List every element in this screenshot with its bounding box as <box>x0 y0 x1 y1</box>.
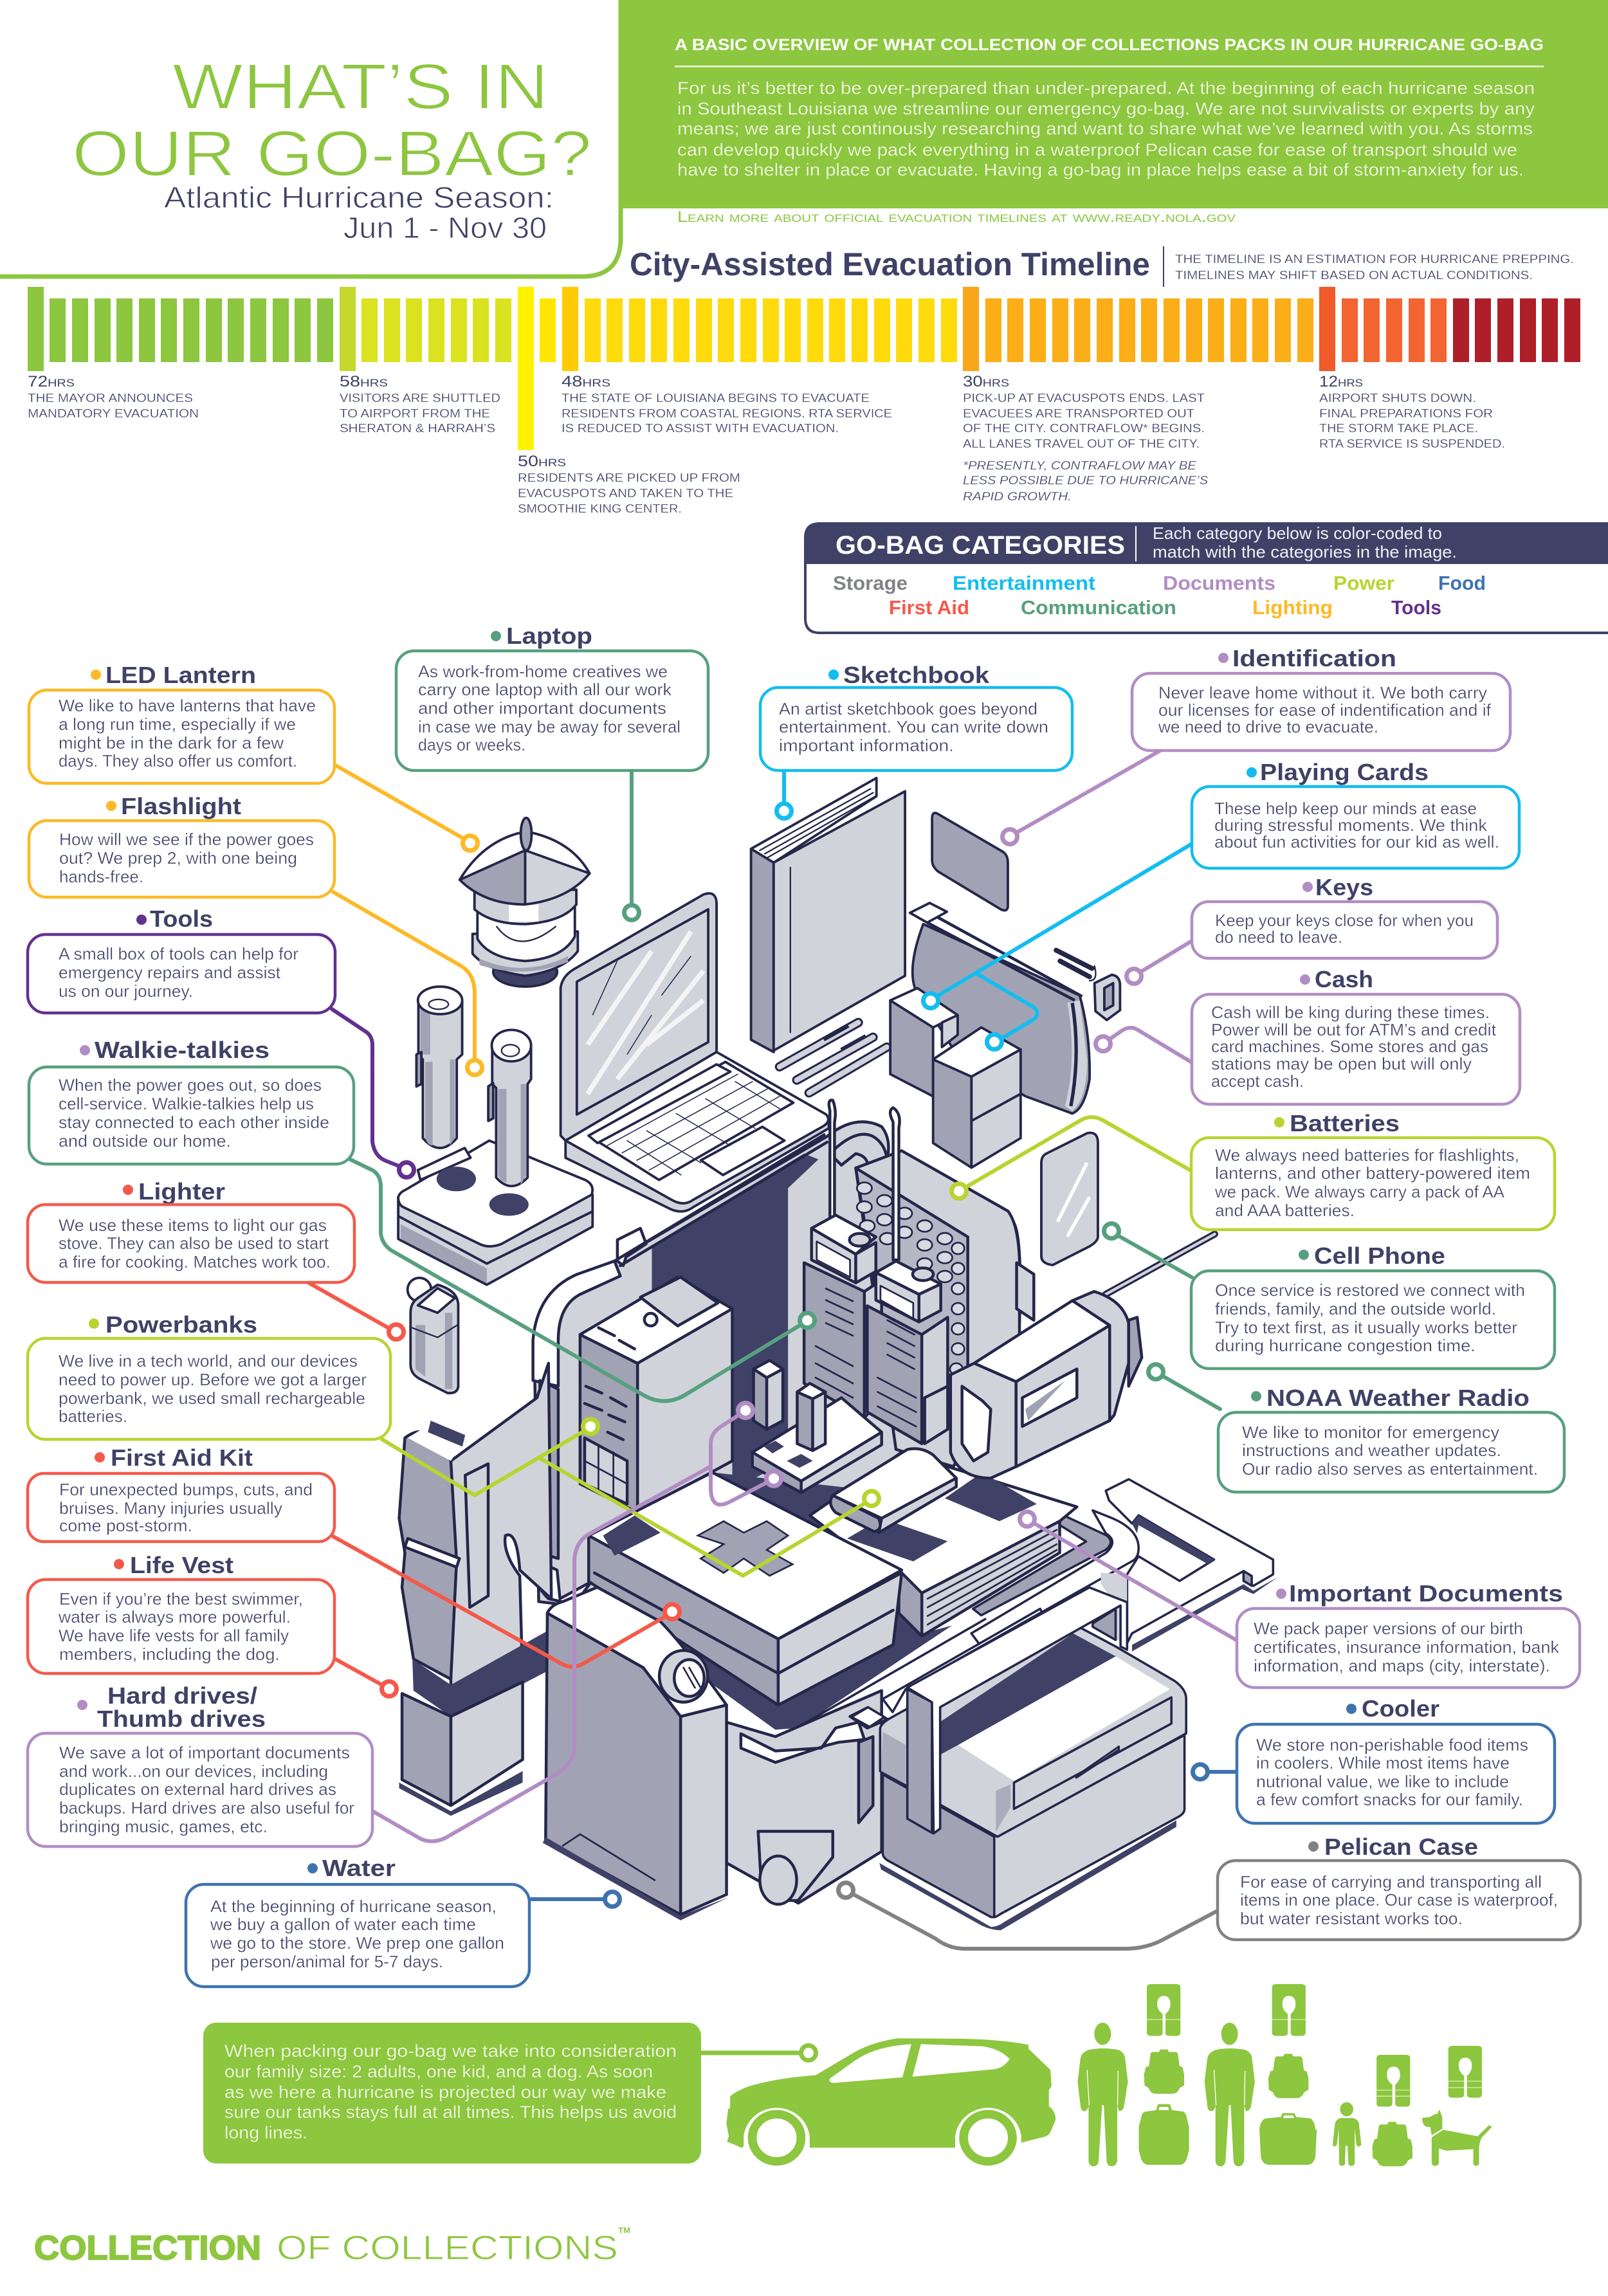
arrow: Cooler <box>1192 1765 1237 1779</box>
callout: Life Vest: members, including the dog. <box>59 1645 280 1664</box>
callout: Life Vest: Even if you’re the best swimmer, <box>59 1589 303 1608</box>
callout: Batteries: lanterns, and other battery-powered item <box>1215 1163 1530 1183</box>
callout: First Aid Kit: For unexpected bumps, cuts, and <box>59 1480 313 1499</box>
timeline label: 58 hours: SHERATON & HARRAH’S <box>340 422 495 435</box>
callout: Walkie-talkies: Walkie-talkies <box>95 1037 270 1063</box>
callout: Keys: do need to leave. <box>1215 927 1342 947</box>
callout: Important Documents <box>1237 1580 1580 1688</box>
icon: portable battery tower <box>580 1277 732 1513</box>
callout: Life Vest: Life Vest <box>130 1552 233 1578</box>
panel: go-bag categories: Food <box>1438 572 1486 594</box>
header panel: green overview background <box>619 0 1608 208</box>
timeline label: 72 hours: MANDATORY EVACUATION <box>28 407 199 420</box>
arrow: Flashlight <box>333 892 482 1075</box>
callout: Powerbanks: Powerbanks <box>105 1311 257 1338</box>
callout: LED Lantern: LED Lantern <box>105 662 256 688</box>
panel: go-bag categories: Tools <box>1391 596 1441 619</box>
arrow: Walkie-talkies <box>351 1160 814 1401</box>
callout: Keys: Keep your keys close for when you <box>1215 911 1474 930</box>
callout: Playing Cards: about fun activities for our kid as well. <box>1214 832 1499 852</box>
callout: NOAA Weather Radio: NOAA Weather Radio <box>1266 1385 1530 1411</box>
timeline label: 12 hours: AIRPORT SHUTS DOWN. <box>1319 392 1476 405</box>
callout: Laptop: and other important documents <box>418 698 666 718</box>
timeline label: 50 hours: RESIDENTS ARE PICKED UP FROM <box>518 471 740 484</box>
callout: Important Documents: Important Documents <box>1289 1580 1563 1607</box>
callout: Cell Phone: Once service is restored we connect with <box>1215 1280 1525 1300</box>
evacuation link: Learn more about official evacuation timelines at www.ready.nola.gov <box>677 208 1236 226</box>
panel: go-bag categories: Each category below is color-coded to <box>1153 524 1442 543</box>
icon: lighter <box>408 1278 458 1393</box>
callout: First Aid Kit: First Aid Kit <box>111 1444 253 1471</box>
callout: Cash: Cash will be king during these times. <box>1211 1003 1490 1022</box>
panel: go-bag categories: Lighting <box>1252 596 1333 619</box>
timeline label: 72 hours: THE MAYOR ANNOUNCES <box>28 392 193 405</box>
callout: Life Vest <box>28 1552 334 1673</box>
illustration: right side of case and lid frame <box>784 1479 1278 1754</box>
icon: life vest dog <box>1448 2046 1482 2098</box>
callout: Important Documents: information, and maps (city, interstate). <box>1254 1656 1550 1675</box>
callout: Laptop: As work-from-home creatives we <box>418 662 668 681</box>
timeline label: 12 hours: 12HRS <box>1319 373 1363 390</box>
callout: Playing Cards: These help keep our minds at ease <box>1214 799 1477 818</box>
timeline note: THE TIMELINE IS AN ESTIMATION FOR HURRICANE PREPPING. <box>1175 253 1574 266</box>
callout: Hard drives / Thumb drives: duplicates on external hard drives as <box>59 1780 336 1799</box>
icon: NOAA weather radio <box>951 1234 1215 1478</box>
icon: radio speaker housing <box>855 1151 1019 1466</box>
timeline label: 50 hours <box>518 453 740 515</box>
callout: Tools: A small box of tools can help for <box>59 944 298 963</box>
timeline label: 58 hours <box>340 373 500 435</box>
callout: Water: we buy a gallon of water each time <box>210 1915 476 1934</box>
icon: walkie-talkies <box>804 1100 947 1444</box>
arrow: Water <box>529 1892 620 1906</box>
callout: Batteries: Batteries <box>1290 1110 1400 1136</box>
callout: LED Lantern <box>29 662 334 783</box>
icon: tool box <box>398 1140 592 1285</box>
timeline label: 48 hours: 48 HRS <box>562 373 610 390</box>
callout: Walkie-talkies: When the power goes out, so does <box>59 1075 322 1095</box>
callout: Powerbanks: powerbank, we used small rechargeable <box>59 1389 365 1408</box>
title <box>72 51 592 190</box>
icon: car <box>726 2038 1055 2162</box>
callout: LED Lantern: days. They also offer us comfort. <box>59 751 297 770</box>
callout: Hard drives / Thumb drives <box>28 1682 372 1846</box>
icon: family and gear <box>1077 1984 1492 2166</box>
arrow: Cell Phone <box>1104 1223 1192 1277</box>
callout: Pelican Case: but water resistant works too. <box>1240 1909 1463 1928</box>
callout: Cash: Power will be out for ATM’s and credit <box>1211 1020 1497 1039</box>
timeline label: 12 hours: THE STORM TAKE PLACE. <box>1319 422 1478 435</box>
callout: LED Lantern: We like to have lanterns that have <box>59 696 316 715</box>
arrow: Cash <box>1096 1028 1192 1062</box>
callout: Powerbanks <box>28 1311 390 1439</box>
timeline label: 12 hours <box>1319 373 1505 450</box>
callout: Flashlight: hands-free. <box>59 867 143 886</box>
icon: backpack three <box>1372 2122 1412 2166</box>
callout: Sketchbook <box>760 662 1072 770</box>
callout: Cell Phone: during hurricane congestion time. <box>1215 1336 1476 1355</box>
arrow: family note to car <box>701 2045 816 2061</box>
illustration: pelican case back lid <box>531 1122 1068 1729</box>
callout: Playing Cards: during stressful moments. We think <box>1214 815 1488 835</box>
timeline label: 30 hours <box>963 373 1208 503</box>
callout: Identification: Identification <box>1232 645 1396 671</box>
timeline label: 48 hours: IS REDUCED TO ASSIST WITH EVACUATION. <box>562 422 839 435</box>
icon: suitcase two <box>1259 2113 1317 2165</box>
panel: family note: When packing our go-bag we take into consideration <box>224 2041 677 2061</box>
timeline label: 50 hours: 50 HRS <box>518 453 566 470</box>
arrow: First Aid Kit <box>333 1536 679 1667</box>
callout: Cooler: We store non-perishable food items <box>1256 1735 1528 1754</box>
icon: adult one <box>1077 2023 1128 2166</box>
illustration: items above the case <box>398 778 1120 1393</box>
callout: First Aid Kit <box>28 1444 334 1542</box>
callout: Flashlight: How will we see if the power goes <box>59 830 314 849</box>
callout: NOAA Weather Radio: Our radio also serves as entertainment. <box>1242 1459 1538 1479</box>
arrow: Powerbanks <box>382 1419 879 1576</box>
callout: Batteries: we pack. We always carry a pack of AA <box>1214 1182 1505 1201</box>
panel: family note: long lines. <box>224 2123 307 2142</box>
icon: power bank <box>830 1449 956 1533</box>
callout: Powerbanks: batteries. <box>59 1407 127 1426</box>
arrow: Important Documents <box>1020 1511 1236 1640</box>
logo: COLLECTION <box>34 2229 261 2267</box>
callout: Sketchbook: entertainment. You can write down <box>779 717 1048 736</box>
callout: Powerbanks: need to power up. Before we got a larger <box>59 1370 367 1389</box>
callout: Water: we go to the store. We prep one gallon <box>210 1933 504 1953</box>
callout: Cash: accept cash. <box>1211 1071 1304 1091</box>
panel: go-bag categories <box>804 524 1608 633</box>
callout: Batteries: and AAA batteries. <box>1215 1201 1355 1220</box>
panel: family note: as we here a hurricane is projected our way we make <box>224 2082 666 2102</box>
callout: Pelican Case <box>1218 1834 1580 1940</box>
title panel outline <box>0 0 621 277</box>
timeline label: 50 hours: SMOOTHIE KING CENTER. <box>518 502 682 515</box>
callout: NOAA Weather Radio: instructions and weather updates. <box>1242 1441 1501 1460</box>
callout: Pelican Case: For ease of carrying and transporting all <box>1240 1872 1542 1891</box>
callout: Walkie-talkies: and outside our home. <box>59 1131 231 1151</box>
timeline label: 30 hours: OF THE CITY. CONTRAFLOW* BEGINS. <box>963 422 1205 435</box>
panel: go-bag categories: Communication <box>1021 596 1176 619</box>
arrow: Identification <box>1002 751 1160 844</box>
icon: first aid kit <box>589 1472 902 1705</box>
callout: Laptop: Laptop <box>506 623 592 649</box>
callout: Identification: Never leave home without it. We both carry <box>1158 683 1487 702</box>
callout: Water <box>186 1855 529 1987</box>
callout: Tools: Tools <box>150 906 213 932</box>
icon: LED lantern <box>460 818 590 987</box>
callout: Lighter <box>28 1178 354 1282</box>
panel: go-bag categories: Power <box>1333 572 1394 594</box>
timeline label: 72 hours <box>28 373 199 420</box>
timeline label: 58 hours: TO AIRPORT FROM THE <box>340 407 490 420</box>
callout: NOAA Weather Radio <box>1218 1385 1564 1492</box>
icon: backpack two <box>1268 2054 1308 2098</box>
callout: Sketchbook: Sketchbook <box>843 662 990 688</box>
icon: kid <box>1333 2102 1361 2166</box>
panel: go-bag categories: GO-BAG CATEGORIES <box>836 531 1125 560</box>
panel: go-bag categories: match with the categories in the image. <box>1153 542 1457 561</box>
title: WHAT’S IN <box>172 51 549 123</box>
callout: Keys: Keys <box>1315 874 1373 900</box>
callout: LED Lantern: a long run time, especially if we <box>59 715 296 734</box>
callout: Playing Cards: Playing Cards <box>1260 759 1429 785</box>
icon: identification card <box>932 813 1008 911</box>
callout: Cooler: Cooler <box>1362 1695 1439 1722</box>
timeline label: 48 hours: THE STATE OF LOUISIANA BEGINS TO EVACUATE <box>562 392 870 405</box>
callout: Sketchbook: important information. <box>779 736 954 755</box>
callout: Hard drives / Thumb drives: backups. Hard drives are also useful for <box>59 1798 354 1818</box>
overview paragraph: means; we are just continously researching and want to share what we’ve learned with you. As storms <box>677 119 1533 138</box>
callout: Hard drives / Thumb drives: and work...on our devices, including <box>59 1762 328 1781</box>
callout: Life Vest: water is always more powerful. <box>58 1607 291 1626</box>
callout: Batteries: We always need batteries for flashlights, <box>1215 1145 1519 1165</box>
overview paragraph: have to shelter in place or evacuate. Having a go-bag in place helps ease a bit of storm-anxiety for us. <box>677 160 1524 179</box>
callout: Flashlight: out? We prep 2, with one being <box>59 848 297 868</box>
timeline label: 30 hours: EVACUEES ARE TRANSPORTED OUT <box>963 407 1194 420</box>
overview paragraph: can develop quickly we pack everything in a waterproof Pelican case for ease of transport should we <box>677 140 1517 159</box>
icon: sketchbook <box>751 778 905 1052</box>
icon: water jug <box>543 1587 728 1920</box>
icon: backpack one <box>1144 2050 1184 2094</box>
timeline label: 30 hours: ALL LANES TRAVEL OUT OF THE CITY. <box>963 437 1200 450</box>
timeline label: 72 hours: 72 HRS <box>28 373 75 390</box>
callout: Hard drives / Thumb drives: Thumb drives <box>97 1706 266 1732</box>
arrow: LED Lantern <box>334 765 477 850</box>
callout: Water: At the beginning of hurricane season, <box>210 1897 497 1916</box>
subtitle: season dates: Atlantic Hurricane Season: <box>164 181 554 214</box>
callout: Tools: us on our journey. <box>59 981 193 1001</box>
timeline label: 30 hours: LESS POSSIBLE DUE TO HURRICANE’S <box>963 474 1208 487</box>
logo: TM <box>618 2226 630 2235</box>
callout: Identification <box>1132 645 1510 751</box>
callout: Lighter: We use these items to light our gas <box>59 1216 327 1235</box>
icon: document pouch <box>910 903 1090 1113</box>
timeline label: 12 hours: RTA SERVICE IS SUSPENDED. <box>1319 437 1505 450</box>
callout: Pelican Case: Pelican Case <box>1324 1834 1478 1860</box>
callout: Keys <box>1192 874 1497 958</box>
callout: Batteries <box>1191 1110 1555 1230</box>
callout: First Aid Kit: bruises. Many injuries usually <box>59 1499 282 1518</box>
timeline label: 48 hours: RESIDENTS FROM COASTAL REGIONS. RTA SERVICE <box>562 407 892 420</box>
callout: Cell Phone: Try to text first, as it usually works better <box>1215 1318 1517 1337</box>
timeline heading: City-Assisted Evacuation Timeline <box>630 246 1150 282</box>
callout: Cell Phone: Cell Phone <box>1314 1243 1445 1269</box>
callout: Walkie-talkies: stay connected to each other inside <box>59 1113 329 1132</box>
icon: thumb drives <box>754 1360 783 1429</box>
timeline label: 30 hours: RAPID GROWTH. <box>963 490 1072 503</box>
callout: Hard drives / Thumb drives: We save a lot of important documents <box>59 1743 350 1762</box>
arrow: Hard drives <box>372 1403 781 1841</box>
timeline label: 30 hours: 30HRS <box>963 373 1009 390</box>
arrow: Lighter <box>308 1282 404 1339</box>
callout: Identification: we need to drive to evacuate. <box>1158 717 1378 736</box>
panel: go-bag categories: Documents <box>1163 572 1275 594</box>
arrow: Life Vest <box>336 1659 396 1697</box>
callout: Cell Phone <box>1191 1243 1555 1369</box>
arrow: Pelican Case <box>839 1883 1218 1949</box>
callout: Lighter: stove. They can also be used to start <box>59 1234 329 1253</box>
callout: Cell Phone: friends, family, and the outside world. <box>1215 1299 1496 1318</box>
icon: pens <box>780 1023 887 1093</box>
arrow: NOAA Weather Radio <box>1149 1365 1220 1409</box>
callout: Lighter: Lighter <box>138 1178 225 1205</box>
icon: important documents <box>810 1452 1077 1636</box>
icon: suitcase one <box>1139 2104 1189 2165</box>
icon: cooler <box>852 1587 1186 1930</box>
arrow: Playing Cards <box>924 844 1192 1050</box>
timeline label: 48 hours <box>562 373 892 435</box>
timeline label: 30 hours: *PRESENTLY, CONTRAFLOW MAY BE <box>963 459 1197 472</box>
callout: Cooler: nutrional value, we like to include <box>1256 1772 1509 1791</box>
callout: Playing Cards <box>1192 759 1519 868</box>
icon: life vest two <box>1272 1984 1306 2036</box>
callout: First Aid Kit: come post-storm. <box>59 1516 192 1535</box>
callout: LED Lantern: might be in the dark for a few <box>59 733 284 752</box>
overview paragraph: For us it’s better to be over-prepared than under-prepared. At the beginning of each hurricane season <box>677 78 1535 98</box>
icon: life vest kid <box>1376 2055 1410 2107</box>
callout: Cash: card machines. Some stores and gas <box>1211 1037 1488 1056</box>
callout: Hard drives / Thumb drives: bringing music, games, etc. <box>59 1817 268 1836</box>
callout: Walkie-talkies <box>29 1037 354 1164</box>
callout: Cooler <box>1237 1695 1555 1823</box>
callout: Life Vest: We have life vests for all family <box>59 1626 289 1645</box>
callout: Water: per person/animal for 5-7 days. <box>211 1952 443 1971</box>
timeline label: 58 hours: VISITORS ARE SHUTTLED <box>340 392 500 405</box>
callout: Tools: emergency repairs and assist <box>59 963 281 982</box>
callout: NOAA Weather Radio: We like to monitor for emergency <box>1242 1423 1499 1442</box>
callout: Flashlight <box>29 793 334 897</box>
icon: hard drive <box>753 1383 882 1493</box>
icon: cell phone <box>1041 1133 1098 1265</box>
callout: Flashlight: Flashlight <box>121 793 241 819</box>
panel: go-bag categories: Entertainment <box>953 572 1095 594</box>
callout: Cash: Cash <box>1315 966 1373 992</box>
callout: Cooler: a few comfort snacks for our family. <box>1256 1790 1523 1809</box>
callout: Sketchbook: An artist sketchbook goes beyond <box>779 699 1037 718</box>
panel: family note: sure our tanks stays full at all times. This helps us avoid <box>224 2102 677 2122</box>
icon: flashlights <box>416 987 531 1186</box>
callout: Hard drives / Thumb drives: Hard drives/ <box>107 1682 257 1709</box>
panel: family note: our family size: 2 adults, one kid, and a dog. As soon <box>224 2062 653 2081</box>
icon: pelican case base <box>727 1691 888 1904</box>
callout: Cash <box>1192 966 1520 1104</box>
callout: Lighter: a fire for cooking. Matches work too. <box>59 1252 331 1271</box>
timeline bars <box>28 287 1580 450</box>
logo <box>34 2226 630 2267</box>
arrow: Sketchbook <box>777 770 791 818</box>
callout: Cash: stations may be open but will only <box>1211 1054 1472 1073</box>
callout: Identification: our licenses for ease of indentification and if <box>1158 700 1492 720</box>
illustration: items inside and around the case <box>399 1100 1215 1920</box>
subtitle: season dates: Jun 1 - Nov 30 <box>343 211 547 244</box>
callout: Laptop: in case we may be away for several <box>418 717 681 736</box>
timeline label: 12 hours: FINAL PREPARATIONS FOR <box>1319 407 1493 420</box>
callout: Tools <box>28 906 335 1013</box>
callout: Powerbanks: We live in a tech world, and our devices <box>59 1351 358 1371</box>
callout: Cooler: in coolers. While most items have <box>1256 1753 1510 1772</box>
icon: life vest one <box>1147 1984 1180 2036</box>
icon: playing cards <box>890 988 1021 1168</box>
panel: family note <box>203 2023 701 2164</box>
timeline label: 50 hours: EVACUSPOTS AND TAKEN TO THE <box>518 487 733 500</box>
callout: Important Documents: We pack paper versions of our birth <box>1254 1619 1523 1638</box>
arrow: Tools <box>332 1009 414 1177</box>
panel: go-bag categories: Storage <box>833 572 908 594</box>
arrow: Batteries <box>952 1117 1192 1199</box>
icon: laptop <box>561 893 828 1212</box>
logo: OF COLLECTIONS <box>277 2229 618 2267</box>
callout: Pelican Case: items in one place. Our case is waterproof, <box>1240 1890 1558 1909</box>
icon: life vests stack <box>399 1363 551 1816</box>
timeline label: 30 hours: PICK-UP AT EVACUSPOTS ENDS. LAST <box>963 392 1205 405</box>
subtitle: season dates <box>164 181 554 244</box>
overview paragraph: in Southeast Louisiana we streamline our emergency go-bag. We are not survivalists or experts by any <box>677 99 1535 118</box>
callout: Laptop: days or weeks. <box>418 735 525 754</box>
timeline label: 58 hours: 58 HRS <box>340 373 388 390</box>
panel: go-bag categories: First Aid <box>889 596 969 619</box>
arrow: Keys <box>1127 941 1192 984</box>
callout: Water: Water <box>322 1855 396 1881</box>
callout: Laptop: carry one laptop with all our work <box>418 680 672 699</box>
callout: Important Documents: certificates, insurance information, bank <box>1254 1637 1560 1657</box>
callout: Laptop <box>396 623 708 770</box>
callout: Walkie-talkies: cell-service. Walkie-talkies help us <box>59 1094 314 1113</box>
title: OUR GO-BAG? <box>72 118 592 190</box>
icon: adult two <box>1205 2023 1255 2166</box>
overview heading: A BASIC OVERVIEW OF WHAT COLLECTION OF COLLECTIONS PACKS IN OUR HURRICANE GO-BAG <box>675 36 1544 54</box>
overview paragraph <box>677 78 1535 179</box>
icon: keys <box>1056 950 1120 1020</box>
timeline note <box>1175 253 1574 282</box>
icon: dog <box>1422 2109 1492 2166</box>
timeline note: TIMELINES MAY SHIFT BASED ON ACTUAL CONDITIONS. <box>1175 269 1533 282</box>
arrow: Laptop <box>624 770 639 920</box>
